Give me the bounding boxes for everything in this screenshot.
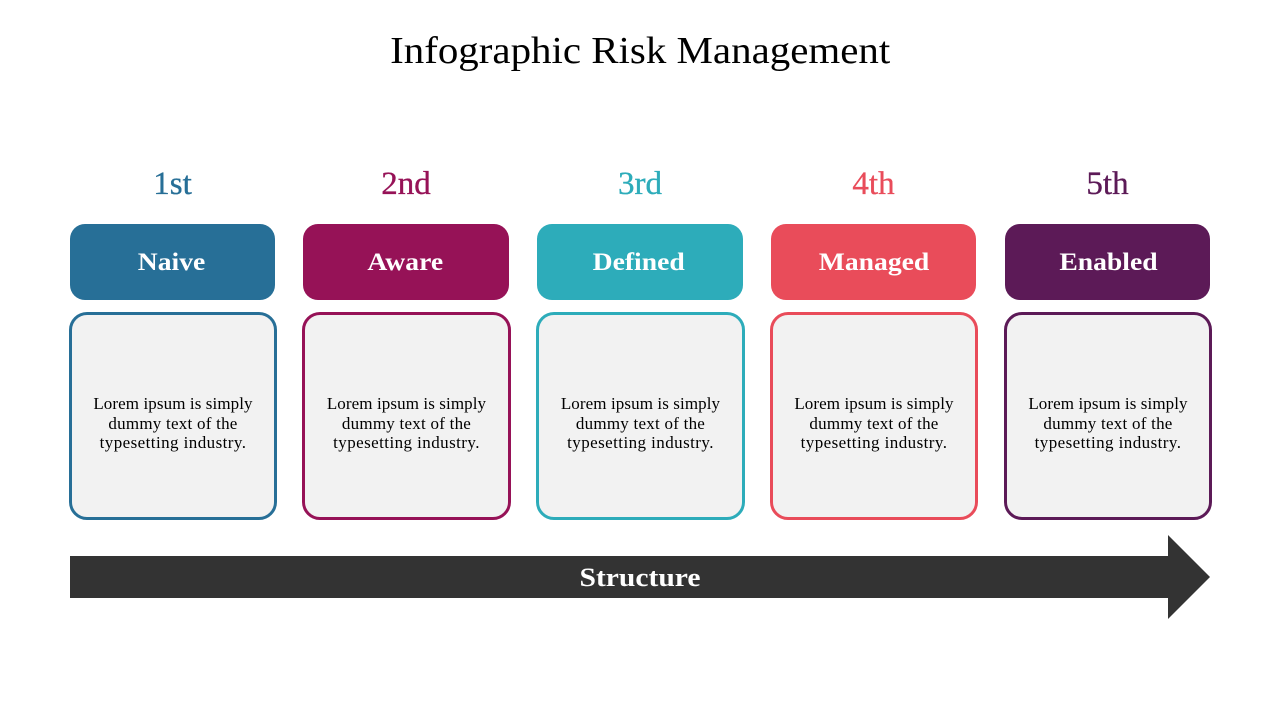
- panel: Defined text: Lorem ipsum is simply: [561, 394, 720, 413]
- arrow: Structure: Structure: [580, 563, 700, 592]
- column 2 label: 2nd: [381, 166, 431, 202]
- column 5 label: 5th: [1086, 166, 1129, 202]
- panel: Managed text: Lorem ipsum is simply: [794, 394, 954, 413]
- column 4 label: 4th: [852, 166, 895, 202]
- panel: Aware text: typesetting industry.: [333, 433, 480, 452]
- panel: Naive text: typesetting industry.: [100, 433, 246, 452]
- title: Infographic Risk Management: [390, 30, 890, 72]
- header: Managed: [771, 224, 976, 300]
- header: Aware: [303, 224, 509, 300]
- panel: Managed text: [770, 312, 978, 520]
- panel: Aware text: [302, 312, 511, 520]
- panel: Naive text: dummy text of the: [108, 414, 238, 433]
- panel: Enabled text: typesetting industry.: [1035, 433, 1181, 452]
- panel: Enabled text: Lorem ipsum is simply: [1028, 394, 1188, 413]
- column 1 label: 1st: [153, 166, 192, 202]
- panel: Naive text: [69, 312, 277, 520]
- panel: Defined text: [536, 312, 745, 520]
- panel: Managed text: typesetting industry.: [801, 433, 947, 452]
- panel: Defined text: dummy text of the: [576, 414, 705, 433]
- header: Naive: [70, 224, 275, 300]
- header: Enabled: [1005, 224, 1210, 300]
- panel: Aware text: Lorem ipsum is simply: [327, 394, 486, 413]
- header: Naive: Naive: [138, 249, 205, 276]
- panel: Enabled text: dummy text of the: [1043, 414, 1173, 433]
- header: Defined: Defined: [593, 249, 685, 276]
- panel: Defined text: typesetting industry.: [567, 433, 714, 452]
- header: Enabled: Enabled: [1059, 249, 1158, 276]
- panel: Enabled text: [1004, 312, 1212, 520]
- header: Managed: Managed: [818, 249, 929, 276]
- panel: Managed text: dummy text of the: [809, 414, 939, 433]
- header: Defined: [537, 224, 743, 300]
- header: Aware: Aware: [367, 249, 443, 276]
- panel: Aware text: dummy text of the: [342, 414, 471, 433]
- panel: Naive text: Lorem ipsum is simply: [93, 394, 253, 413]
- column 3 label: 3rd: [618, 166, 662, 202]
